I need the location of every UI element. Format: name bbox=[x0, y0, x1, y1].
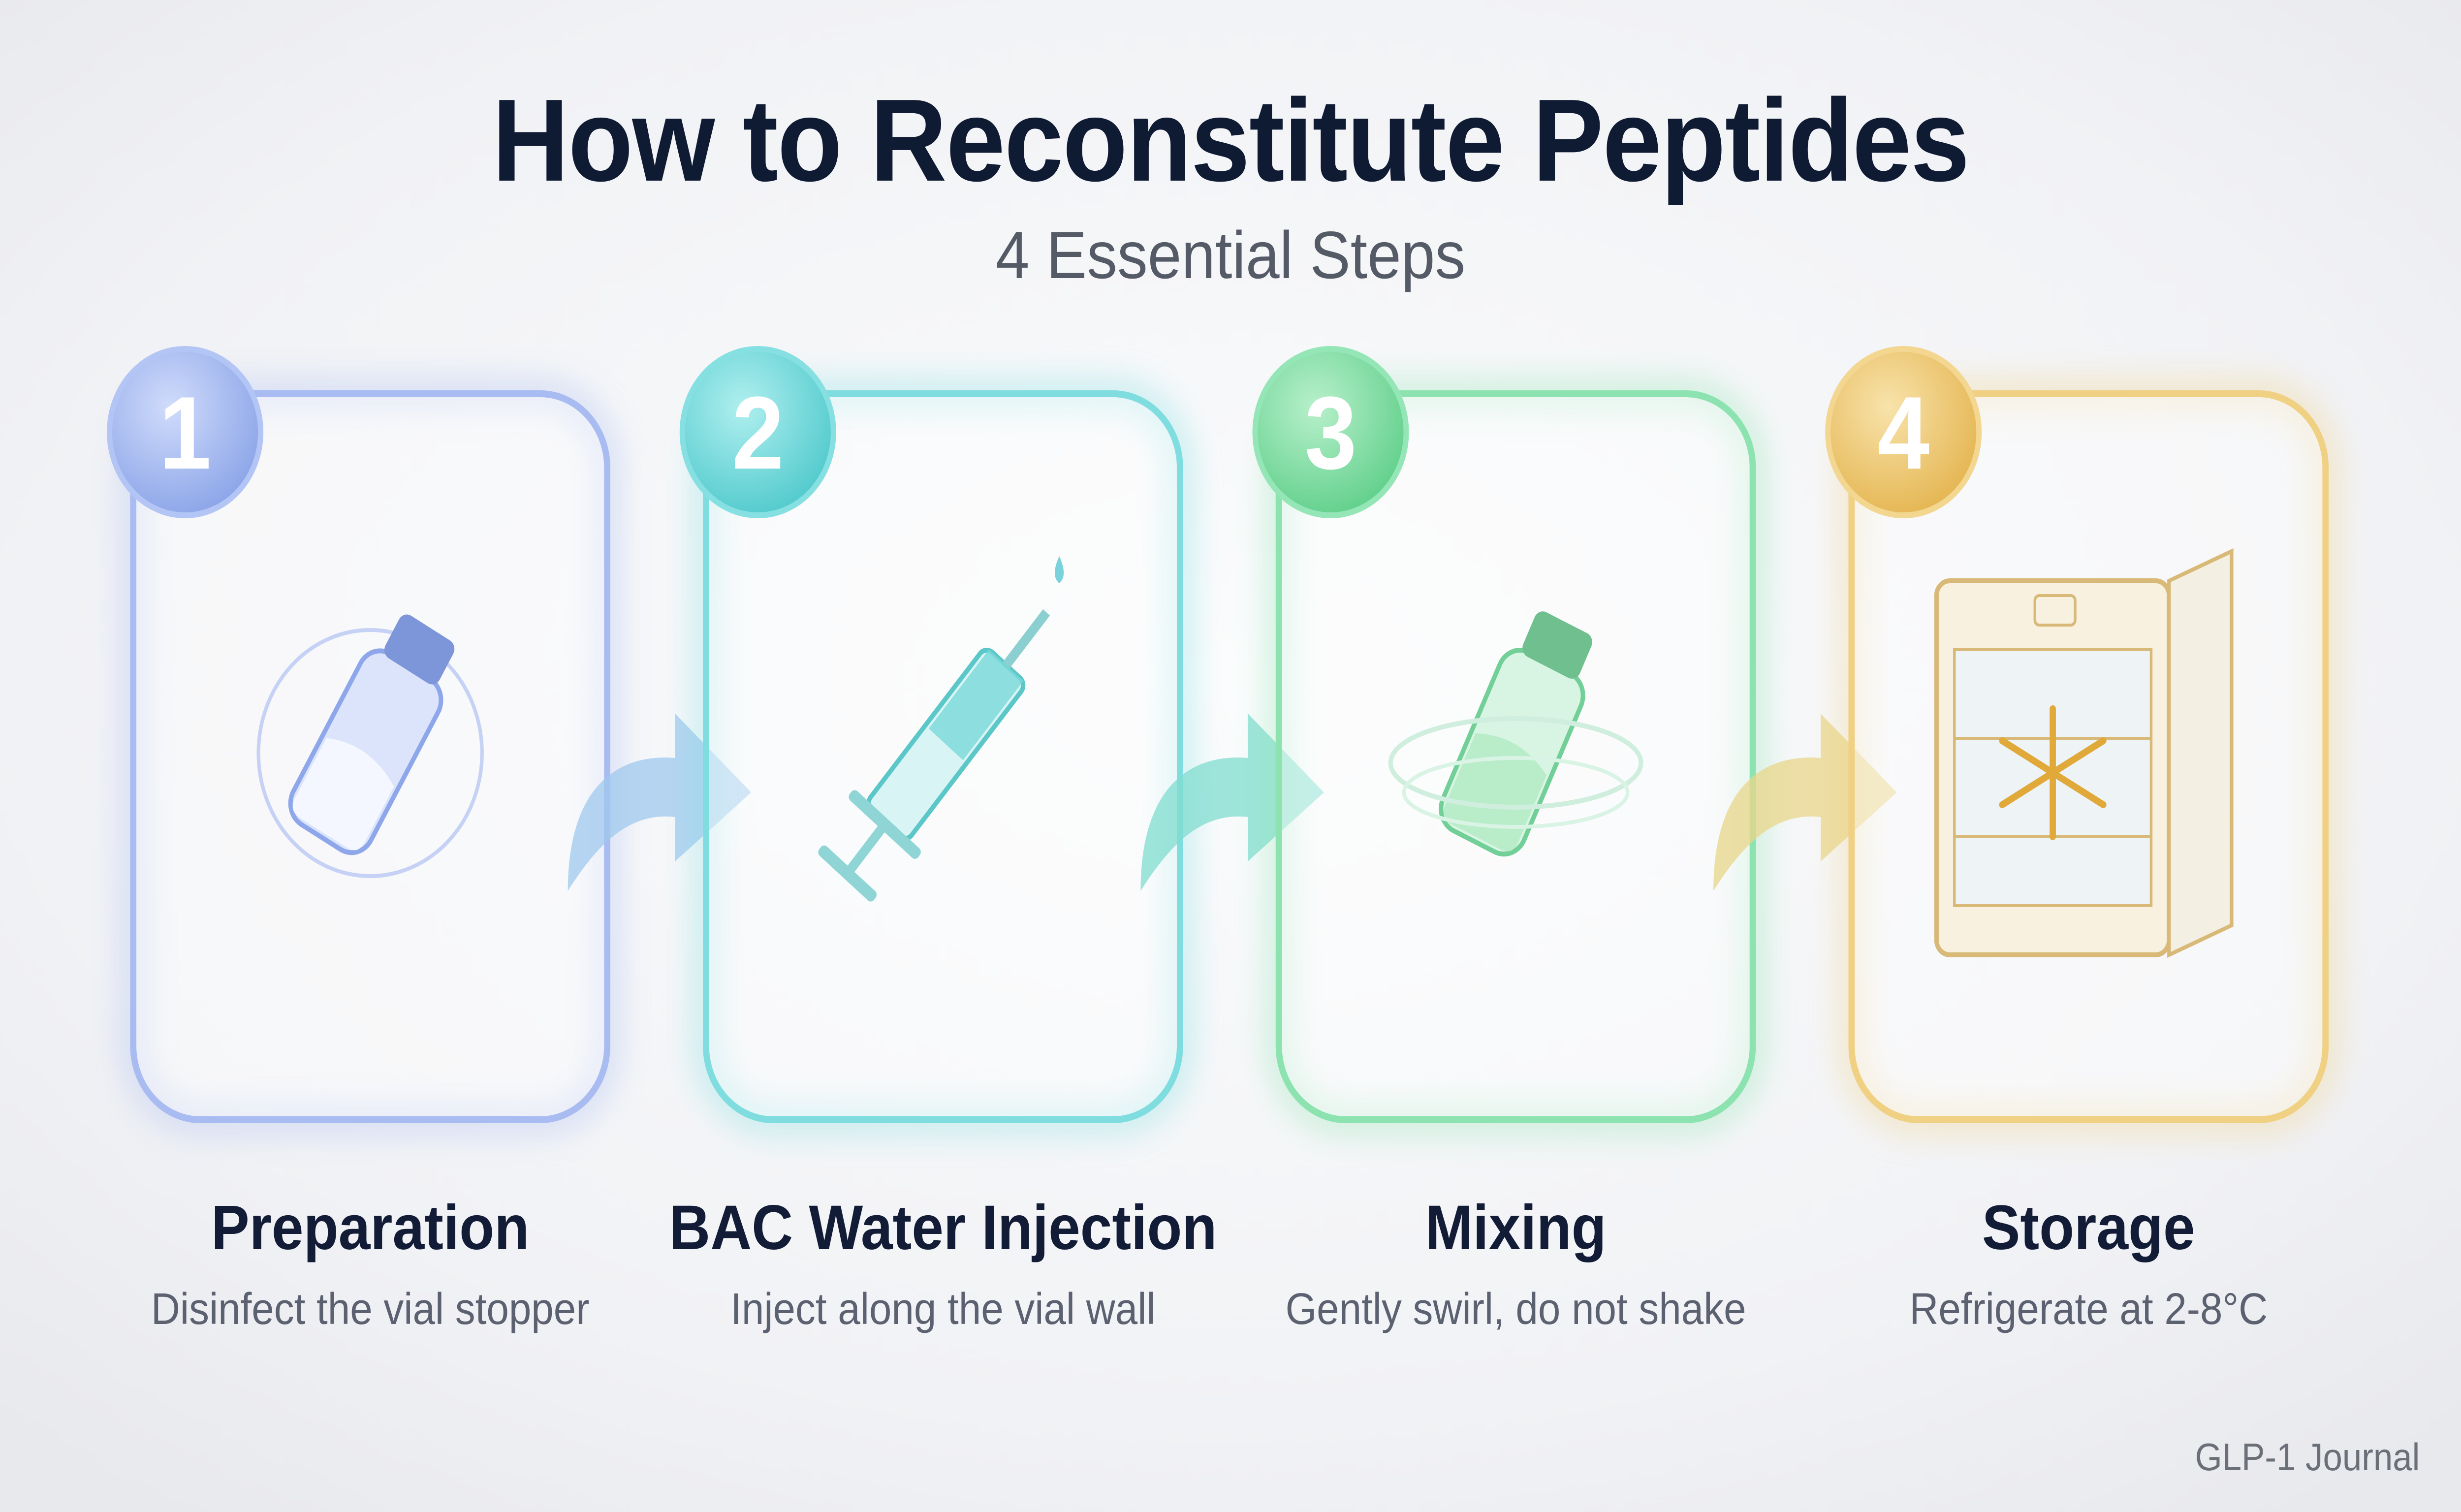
number badge 2 bbox=[682, 349, 833, 515]
label: BAC water injection: BAC Water Injection bbox=[669, 1192, 1217, 1262]
icon: refrigerator bbox=[1936, 551, 2232, 955]
arrow 2 bbox=[1140, 714, 1324, 891]
panel: step 2 BAC water injection bbox=[706, 394, 1180, 1120]
text: preparation: Disinfect the vial stopper bbox=[151, 1284, 589, 1334]
panel: step 1 preparation bbox=[133, 394, 607, 1120]
number badge 3: 3 bbox=[1304, 375, 1357, 491]
arrow 3 bbox=[1713, 714, 1897, 891]
panel: step 4 storage bbox=[1852, 394, 2326, 1120]
number badge 1: 1 bbox=[159, 375, 211, 491]
label: storage: Storage bbox=[1982, 1192, 2195, 1262]
number badge 2: 2 bbox=[732, 375, 784, 491]
number badge 1 bbox=[110, 349, 261, 515]
arrow 1 bbox=[568, 714, 751, 891]
label: mixing: Mixing bbox=[1425, 1192, 1607, 1262]
label: preparation: Preparation bbox=[211, 1192, 529, 1262]
text: storage: Refrigerate at 2-8°C bbox=[1909, 1284, 2268, 1334]
number badge 4 bbox=[1828, 349, 1979, 515]
number badge 4: 4 bbox=[1877, 375, 1929, 491]
title: How to Reconstitute Peptides bbox=[492, 75, 1969, 206]
icon: syringe bbox=[810, 556, 1081, 910]
subtitle: 4 Essential Steps bbox=[996, 217, 1465, 292]
text: mixing: Gently swirl, do not shake bbox=[1286, 1284, 1746, 1334]
icon: vial swirl bbox=[1390, 602, 1641, 862]
footer credit: GLP-1 Journal bbox=[2195, 1436, 2420, 1479]
panel: step 3 mixing bbox=[1279, 394, 1753, 1120]
number badge 3 bbox=[1255, 349, 1406, 515]
icon: vial bbox=[258, 603, 482, 876]
text: injection: Inject along the vial wall bbox=[730, 1284, 1156, 1334]
